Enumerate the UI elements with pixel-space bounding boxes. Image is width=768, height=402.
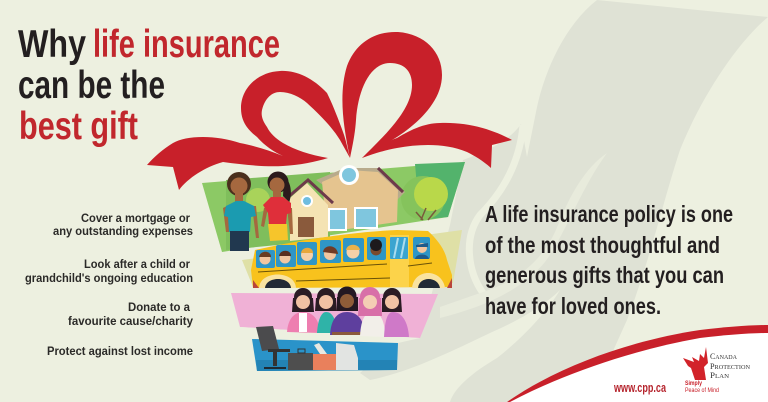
title: can be the	[18, 64, 165, 107]
background hand watermark	[360, 0, 768, 402]
title: Why	[18, 23, 86, 66]
website url: www.cpp.ca	[613, 381, 667, 395]
corner swoosh	[507, 325, 768, 402]
list of benefits: favourite cause/charity	[68, 316, 194, 328]
woman 1	[287, 288, 320, 333]
paragraph: have for loved ones.	[485, 293, 661, 319]
scene: women with ribbons	[231, 286, 438, 343]
logo: Peace of Mind	[685, 387, 719, 394]
list of benefits: Protect against lost income	[47, 346, 193, 358]
woman 5	[382, 288, 409, 337]
title: best gift	[19, 105, 138, 148]
logo: PROTECTION	[710, 361, 750, 371]
box	[313, 343, 336, 370]
woman 2	[315, 288, 337, 333]
woman	[261, 172, 293, 241]
briefcase	[288, 349, 313, 370]
title	[18, 23, 280, 148]
office chair	[256, 326, 290, 369]
list of benefits: Look after a child or	[84, 259, 190, 271]
scene: family and house	[202, 162, 465, 252]
logo: Simply	[685, 380, 702, 387]
woman 4	[358, 287, 385, 337]
woman 3	[330, 286, 365, 335]
title: life insurance	[93, 23, 280, 66]
ribbon bow	[147, 32, 512, 190]
man	[223, 172, 259, 251]
list of benefits	[25, 213, 194, 358]
scene: school bus	[242, 230, 462, 288]
scene: desk with chair, briefcase and papers	[252, 326, 398, 371]
paragraph	[485, 201, 733, 319]
list of benefits: Donate to a	[128, 302, 191, 314]
list of benefits: grandchild's ongoing education	[25, 273, 193, 285]
list of benefits: Cover a mortgage or	[81, 213, 190, 225]
icon: maple leaf	[683, 347, 708, 380]
list of benefits: any outstanding expenses	[53, 226, 193, 238]
bus windows with children	[256, 237, 430, 268]
logo	[683, 347, 750, 394]
paper stack	[336, 343, 358, 370]
gift illustration	[202, 162, 465, 371]
logo: PLAN	[710, 370, 729, 380]
logo: CANADA	[710, 351, 737, 361]
